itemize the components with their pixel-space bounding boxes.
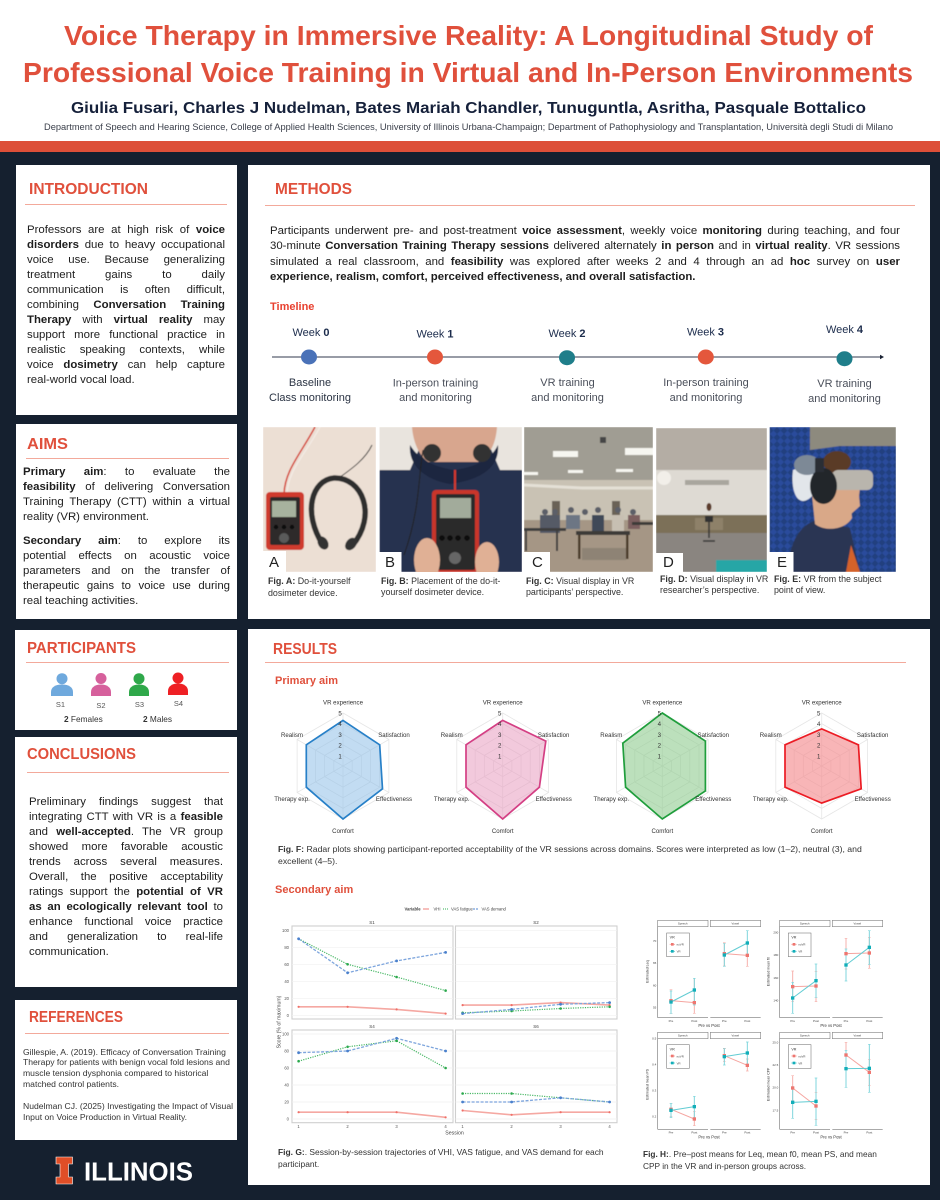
legend: PS: VR	[677, 1061, 681, 1065]
icon: participant S3	[129, 673, 149, 709]
radar: S1: 5	[338, 710, 342, 718]
title and authors: Department of Speech and Hearing Science, College of Applied Health Sciences, University of Illinois Urbana-Champaign; Department of Pathophysiology and Transplantation, Università degli Studi di Milano	[44, 122, 893, 132]
caption: Fig. H: CPP in the VR and in-person groups across.	[643, 1161, 806, 1171]
caption: Fig. A	[268, 576, 351, 598]
chart: Fig. H pre/post means: 55	[653, 1005, 657, 1009]
legend: Leq: noVR	[677, 943, 684, 947]
line chart: Fig. G trajectories: S4	[369, 1024, 375, 1029]
legend: Leq	[667, 933, 689, 957]
radar: S4: Therapy exp.	[753, 796, 789, 803]
week 2 marker: Week 2	[548, 328, 586, 340]
week 1 marker	[393, 328, 478, 404]
conclusions text: communication.	[29, 946, 109, 958]
photo A: dosimeter device: A	[269, 554, 279, 571]
series: VHI	[299, 1003, 610, 1117]
radar: S4: 2	[817, 742, 821, 750]
chart: Fig. H pre/post means: 160	[773, 976, 779, 980]
count: females: 2 Females	[64, 714, 103, 724]
conclusions text: Preliminary findings suggest that	[29, 796, 223, 808]
introduction text: Professors are at high risk of voice	[27, 224, 225, 236]
radar: S2: 5	[498, 710, 502, 718]
introduction text: treatment gains to daily	[27, 269, 225, 281]
participant icons	[51, 672, 188, 708]
axis text: 20	[284, 996, 290, 1001]
secondary aim text: therapeutic gains to voice use during	[23, 580, 230, 592]
chart: Fig. H pre/post means: Estimated mean PS	[645, 1068, 649, 1100]
panel: results	[248, 629, 930, 1185]
chart: Fig. H pre/post means: 200	[773, 930, 779, 934]
icon: participant S4	[168, 672, 188, 708]
legend: f0: noVR	[798, 943, 805, 947]
week 3 marker: Week 3	[687, 326, 724, 338]
icon: participant S1	[51, 673, 73, 709]
series: VAS demand	[299, 939, 610, 1102]
legend: PS: noVR	[677, 1054, 684, 1058]
photo C: VR classroom participants' view: C	[532, 554, 543, 571]
axis text: 60	[284, 1066, 290, 1070]
caption: Fig. D	[660, 574, 768, 595]
chart: Fig. H pre/post means: 0.3	[652, 1088, 657, 1092]
chart: Fig. H pre/post means: Vowel	[732, 1034, 739, 1038]
radar: S2: Effectiveness	[536, 796, 572, 803]
axis labels: Pre	[844, 1131, 849, 1135]
axis text: 100	[282, 1032, 290, 1036]
subheading: secondary aim: Secondary aim	[275, 884, 353, 896]
introduction text: communication is often difficult,	[27, 284, 225, 296]
photo E: subject wearing headset	[770, 427, 896, 572]
logo: Illinois: ILLINOIS	[84, 1156, 193, 1186]
chart: Fig. H pre/post means: Pre vs Post	[820, 1023, 842, 1028]
series: noVR	[671, 953, 869, 1119]
introduction text: realistic speaking contexts, while	[27, 344, 225, 356]
legend: f0	[788, 933, 811, 957]
introduction text: combining Conversation Training	[27, 299, 225, 311]
secondary aim text: potential effects on acoustic voice	[23, 550, 230, 562]
week 0 marker	[269, 327, 351, 404]
conclusions text: integrating CTT with VR is a feasible	[29, 810, 223, 822]
methods text: simulated a real classroom, and feasibility was explored after weeks 2 and 4 through an ad hoc survey on user	[270, 256, 900, 268]
panel: conclusions	[15, 737, 237, 987]
heading: references: REFERENCES	[29, 1009, 123, 1026]
radar: S4: Satisfaction	[857, 732, 888, 739]
chart: Fig. H pre/post means: Pre vs Post	[820, 1135, 842, 1140]
axis text: 0	[287, 1013, 290, 1018]
references list: Nudelman CJ. (2025) Investigating the Impact of Visual	[23, 1101, 233, 1111]
introduction text: disorders due to heavy occupational	[27, 239, 225, 251]
line chart: Fig. G trajectories	[276, 906, 618, 1136]
radar charts	[274, 700, 891, 835]
references list: muscle tension dysphonia compared to historical	[23, 1068, 208, 1078]
legend	[404, 906, 507, 912]
caption: Fig. F	[278, 844, 862, 866]
radar: S2: 1	[498, 754, 502, 760]
secondary aim text: real teaching activities.	[23, 595, 138, 607]
photo E: subject wearing headset: E	[777, 554, 787, 571]
radar: S2: 4	[498, 721, 502, 728]
axis text: 80	[284, 945, 290, 950]
methods text: experience, realism, comfort, perceived effectiveness, and overall satisfaction.	[270, 271, 695, 283]
radar: S3: 1	[658, 754, 662, 760]
caption: Fig. G	[278, 1147, 604, 1169]
title and authors: Giulia Fusari, Charles J Nudelman, Bates Mariah Chandler, Tunuguntla, Asritha, Pasquale Bottalico	[71, 100, 866, 117]
heading: conclusions: CONCLUSIONS	[27, 746, 136, 763]
legend: f0: VR	[798, 950, 802, 954]
axis labels: Pre	[669, 1131, 674, 1135]
chart: Fig. H pre/post means: Estimated mean CPP	[767, 1067, 771, 1101]
legend: Variable	[404, 906, 421, 912]
header	[0, 0, 940, 152]
week 1 marker: Week 1	[416, 328, 454, 340]
radar: S1	[274, 700, 412, 835]
conclusions text	[29, 796, 223, 958]
line chart: Fig. G trajectories: 2	[510, 1124, 513, 1129]
caption: Fig. E: Fig. E: VR from the subject	[774, 574, 882, 584]
line chart: Fig. G trajectories: 2	[346, 1124, 349, 1129]
series points	[297, 937, 611, 1118]
legend: CPP: noVR	[798, 1054, 805, 1058]
line chart: Fig. G trajectories: Session	[445, 1130, 464, 1136]
axis labels: Pre	[790, 1019, 795, 1023]
timeline	[269, 324, 884, 405]
chart: Fig. H pre/post means: 0.4	[652, 1062, 657, 1066]
legend: Leq: VR	[677, 950, 681, 954]
week 4 marker: VR training	[817, 378, 872, 390]
introduction text: voice dosimetry can help capture	[27, 359, 225, 371]
line chart: Fig. G trajectories: 3	[559, 1124, 562, 1129]
week 4 marker: Week 4	[826, 324, 864, 336]
radar: S1: Therapy exp.	[274, 796, 310, 803]
radar: S2: Therapy exp.	[434, 796, 470, 803]
legend: CPP: VR	[791, 1047, 797, 1051]
legend: VHI	[434, 906, 440, 912]
radar: S2: Satisfaction	[538, 732, 569, 739]
line chart: Fig. G trajectories: S1	[369, 920, 375, 925]
radar: S3: VR experience	[642, 700, 683, 706]
axis labels	[669, 1019, 872, 1135]
primary aim text: Primary aim: to evaluate the	[23, 466, 230, 478]
chart: Fig. H pre/post means: Pre vs Post	[698, 1135, 720, 1140]
legend: Leq: VR	[670, 936, 675, 940]
methods text: 30-minute Conversation Training Therapy sessions delivered alternately in person and in virtual reality. VR sessions	[270, 240, 900, 252]
conclusions text: ratings support the potential of VR	[29, 886, 223, 898]
chart: Fig. H pre/post means	[645, 920, 883, 1140]
line chart: Fig. G trajectories: 4	[608, 1124, 611, 1129]
axis labels: Post	[744, 1019, 750, 1023]
legend: CPP	[788, 1045, 811, 1068]
chart: Fig. H pre/post means: 20.0	[772, 1086, 779, 1090]
chart: Fig. H pre/post means: 17.5	[772, 1109, 779, 1113]
heading: participants: PARTICIPANTS	[27, 640, 136, 657]
week 3 marker	[663, 326, 749, 404]
radar: S3: Comfort	[651, 828, 673, 835]
introduction text: support more functional practice in	[27, 329, 225, 341]
line chart: Fig. G trajectories: 3	[395, 1124, 398, 1129]
week 2 marker: VR training	[540, 377, 595, 389]
series: VAS fatigue	[299, 939, 610, 1102]
axis text: 0	[287, 1116, 290, 1122]
chart: Fig. H pre/post means: 140	[773, 999, 779, 1003]
conclusions text: showed more favorable acoustic	[29, 840, 223, 852]
radar: S3: 2	[658, 742, 662, 750]
week 2 marker	[531, 328, 604, 404]
methods text	[270, 225, 900, 283]
chart: Fig. H pre/post means: 70	[653, 939, 657, 943]
axis text: 80	[284, 1048, 290, 1054]
axis text	[282, 928, 290, 1122]
legend: PS	[667, 1045, 689, 1068]
references list	[23, 1046, 233, 1122]
axis text: 20	[284, 1100, 290, 1104]
caption: Fig. E	[774, 574, 882, 595]
radar: S3: Satisfaction	[698, 732, 729, 739]
secondary aim text: Secondary aim: to explore its	[23, 534, 230, 546]
week 4 marker: and monitoring	[808, 393, 881, 405]
title and authors	[23, 20, 913, 132]
week 1 marker: In-person training	[393, 378, 478, 390]
caption: Fig. D: Fig. D: Visual display in VR	[660, 574, 768, 584]
chart: Fig. H pre/post means: Speech	[678, 922, 688, 926]
chart: Fig. H pre/post means: Pre vs Post	[698, 1023, 720, 1028]
legend: f0: VR	[791, 936, 797, 940]
heading: methods: METHODS	[275, 181, 352, 198]
line chart: Fig. G trajectories: S2	[533, 920, 539, 925]
conclusions text: enhance functional voice practice	[29, 916, 223, 928]
introduction text: voice use. Because generalizing	[27, 254, 225, 266]
methods text: Participants underwent pre- and post-treatment voice assessment, weekly voice monitoring during teaching, and four	[270, 225, 900, 237]
radar: S1: Comfort	[332, 828, 354, 835]
radar: S1: 3	[338, 732, 342, 739]
caption: Fig. C: participants’ perspective.	[526, 587, 623, 597]
heading: aims: AIMS	[27, 436, 68, 453]
radar: S3: 3	[658, 732, 662, 739]
markers: noVR	[669, 951, 871, 1121]
axis labels: Post	[744, 1131, 750, 1135]
caption: Fig. C: Fig. C: Visual display in VR	[526, 576, 634, 586]
caption: Fig. F: excellent (4–5).	[278, 856, 337, 866]
caption: Fig. B: Fig. B: Placement of the do-it-	[381, 576, 500, 586]
caption: Fig. B: yourself dosimeter device.	[381, 587, 484, 597]
count: males: 2 Males	[143, 714, 172, 724]
radar: S3: 5	[658, 710, 662, 718]
secondary aim text	[23, 534, 230, 607]
radar: S2	[434, 700, 572, 835]
axis labels: Post	[813, 1131, 819, 1135]
photo D: VR researcher's view: D	[663, 554, 674, 571]
primary aim text: Training Therapy (CTT) within a virtual	[23, 496, 230, 508]
conclusions text: and well-accepted. The VR group	[29, 826, 223, 838]
photo D: VR researcher's view	[656, 428, 767, 572]
orange stripe	[0, 141, 940, 152]
radar: S4	[753, 700, 891, 835]
axis labels: Post	[866, 1019, 872, 1023]
radar: S1: Effectiveness	[376, 796, 412, 803]
panel frames	[292, 926, 617, 1123]
axis text: 40	[284, 1082, 290, 1088]
photo A: dosimeter device	[263, 427, 376, 572]
radar: S1: 4	[338, 721, 342, 728]
caption: Fig. G: Fig. G:. Session-by-session trajectories of VHI, VAS fatigue, and VAS demand for each	[278, 1147, 604, 1157]
radar: S1: Satisfaction	[378, 732, 410, 739]
axis labels: Pre	[790, 1131, 795, 1135]
secondary aim text: parameters and on the transfer of	[23, 565, 230, 577]
markers: VR	[669, 941, 871, 1112]
chart: Fig. H pre/post means: Estimated mean f0	[767, 957, 771, 986]
conclusions text: Overall, the positive acceptability	[29, 870, 223, 882]
conclusions text: trends across several measures.	[29, 856, 223, 868]
introduction text	[27, 224, 225, 386]
icon: participant S4: S4	[174, 699, 183, 708]
radar: S3: Realism	[600, 732, 622, 739]
week 1 marker: and monitoring	[399, 392, 472, 404]
radar: S2: Comfort	[492, 828, 514, 835]
caption: Fig. D: researcher’s perspective.	[660, 585, 759, 595]
caption: Fig. A: dosimeter device.	[268, 588, 338, 598]
introduction text: real-world vocal load.	[27, 374, 135, 386]
week 0 marker: Class monitoring	[269, 392, 351, 404]
chart: Fig. H pre/post means: 0.5	[652, 1037, 657, 1041]
panel: aims	[16, 424, 237, 619]
radar: S4: 3	[817, 732, 821, 739]
radar: S3: Effectiveness	[695, 796, 731, 803]
primary aim text	[23, 466, 230, 522]
chart: Fig. H pre/post means: Speech	[800, 1034, 810, 1038]
radar: S4: 1	[817, 754, 821, 760]
chart: Fig. H pre/post means: 60	[653, 983, 657, 987]
icon: participant S2	[91, 673, 111, 710]
error bars: VR	[670, 931, 871, 1125]
subheading: primary aim: Primary aim	[275, 675, 338, 687]
radar: S1: Realism	[281, 732, 303, 739]
axis labels: Pre	[669, 1019, 674, 1023]
conclusions text: as an ecologically relevant tool to	[29, 900, 223, 912]
radar: S4: 4	[817, 721, 821, 728]
axis labels: Post	[813, 1019, 819, 1023]
axis text: 100	[282, 928, 290, 933]
conclusions text: and generalization to real-life	[29, 930, 223, 942]
primary aim text: feasibility of delivering Conversation	[23, 480, 230, 492]
axis labels: Post	[866, 1131, 872, 1135]
line chart: Fig. G trajectories: 1	[297, 1124, 300, 1129]
legend: CPP: VR	[798, 1061, 802, 1065]
week 2 marker: and monitoring	[531, 392, 604, 404]
legend: VAS demand	[482, 906, 507, 912]
strips and axes	[658, 920, 883, 1039]
radar: S2: 3	[498, 732, 502, 739]
radar: S4: Comfort	[811, 828, 833, 835]
week 4 marker	[808, 324, 881, 405]
references list: Gillespie, A. (2019). Efficacy of Conversation Training	[23, 1046, 226, 1056]
chart: Fig. H pre/post means: Speech	[800, 922, 810, 926]
radar: S4: VR experience	[802, 700, 842, 706]
legend: VAS fatigue	[451, 906, 473, 912]
axis labels: Post	[691, 1131, 697, 1135]
panel: methods	[248, 165, 930, 619]
heading: introduction: INTRODUCTION	[29, 181, 148, 198]
week 0 marker: Week 0	[292, 327, 330, 339]
panel: references	[15, 1000, 237, 1140]
radar: S1: VR experience	[323, 700, 364, 706]
radar: S4: Effectiveness	[855, 796, 891, 803]
heading: results: RESULTS	[273, 641, 337, 658]
radar: S1: 2	[338, 742, 342, 750]
radar: S2: 2	[498, 742, 502, 750]
chart: Fig. H pre/post means: 0.2	[652, 1114, 657, 1118]
radar: S3	[594, 700, 731, 835]
axis labels: Post	[691, 1019, 697, 1023]
error bars: noVR	[670, 937, 871, 1126]
chart: Fig. H pre/post means: 22.5	[772, 1063, 779, 1067]
title and authors: Voice Therapy in Immersive Reality: A Longitudinal Study of	[64, 20, 874, 51]
chart: Fig. H pre/post means: 65	[653, 961, 657, 965]
photo B: dosimeter placement	[379, 427, 522, 582]
week 0 marker: Baseline	[289, 377, 331, 389]
photo B: dosimeter placement: B	[385, 554, 395, 571]
primary aim text: reality (VR) environment.	[23, 510, 149, 522]
radar: S3: 4	[658, 721, 662, 728]
chart: Fig. H pre/post means: Estimated Leq	[645, 960, 649, 983]
chart: Fig. H pre/post means: Vowel	[732, 922, 739, 926]
chart: Fig. H pre/post means: Vowel	[854, 922, 861, 926]
caption: Fig. F: Fig. F: Radar plots showing participant-reported acceptability of the VR sessions across domains. Scores were interpreted as low (1–2), neutral (3), and	[278, 844, 862, 854]
introduction text: Therapy with virtual reality may	[27, 314, 225, 326]
caption: Fig. B	[381, 576, 500, 597]
radar: S2: VR experience	[483, 700, 523, 706]
radar: S3: Therapy exp.	[594, 796, 629, 803]
caption: Fig. E: point of view.	[774, 585, 825, 595]
axis labels: Pre	[722, 1019, 727, 1023]
week 3 marker: In-person training	[663, 377, 749, 389]
references list: Therapy for patients with benign vocal fold lesions and	[23, 1057, 230, 1067]
axis text: 60	[284, 962, 290, 967]
caption: Fig. G: participant.	[278, 1159, 319, 1169]
chart: Fig. H pre/post means: 180	[773, 953, 779, 957]
series: VR	[671, 943, 869, 1110]
line chart: Fig. G trajectories: 1	[461, 1124, 464, 1129]
axis text: 40	[284, 979, 290, 984]
chart: Fig. H pre/post means: Vowel	[854, 1034, 861, 1038]
line chart: Fig. G trajectories: S6	[533, 1024, 539, 1029]
line chart: Fig. G trajectories: Score (% of maximum)	[276, 995, 282, 1048]
radar: S4: Realism	[760, 732, 782, 739]
radar: S2: Realism	[441, 732, 463, 739]
axis labels: Pre	[722, 1131, 727, 1135]
photo row	[263, 427, 896, 572]
photo C: VR classroom participants' view	[524, 427, 653, 572]
caption: Fig. H	[643, 1149, 877, 1171]
legend: PS: VR	[670, 1047, 675, 1051]
axis labels: Pre	[844, 1019, 849, 1023]
chart: Fig. H pre/post means: Speech	[678, 1034, 688, 1038]
title and authors: Professional Voice Training in Virtual and In-Person Environments	[23, 57, 913, 88]
radar: S4: 5	[817, 710, 821, 718]
radar: S1: 1	[338, 754, 342, 760]
caption: Fig. A: Fig. A: Do-it-yourself	[268, 576, 351, 586]
references list: Input on Voice Production in Virtual Reality.	[23, 1112, 187, 1122]
chart: Fig. H pre/post means: 25.0	[772, 1040, 779, 1044]
panel: introduction	[16, 165, 237, 415]
caption: Fig. H: Fig. H:. Pre–post means for Leq, mean f0, mean PS, and mean	[643, 1149, 877, 1159]
subheading: timeline: Timeline	[270, 301, 314, 313]
week 3 marker: and monitoring	[670, 392, 742, 404]
caption: Fig. C	[526, 576, 634, 597]
references list: matched control patients.	[23, 1079, 119, 1089]
line chart: Fig. G trajectories: 4	[444, 1124, 447, 1129]
panel: participants	[15, 630, 237, 730]
